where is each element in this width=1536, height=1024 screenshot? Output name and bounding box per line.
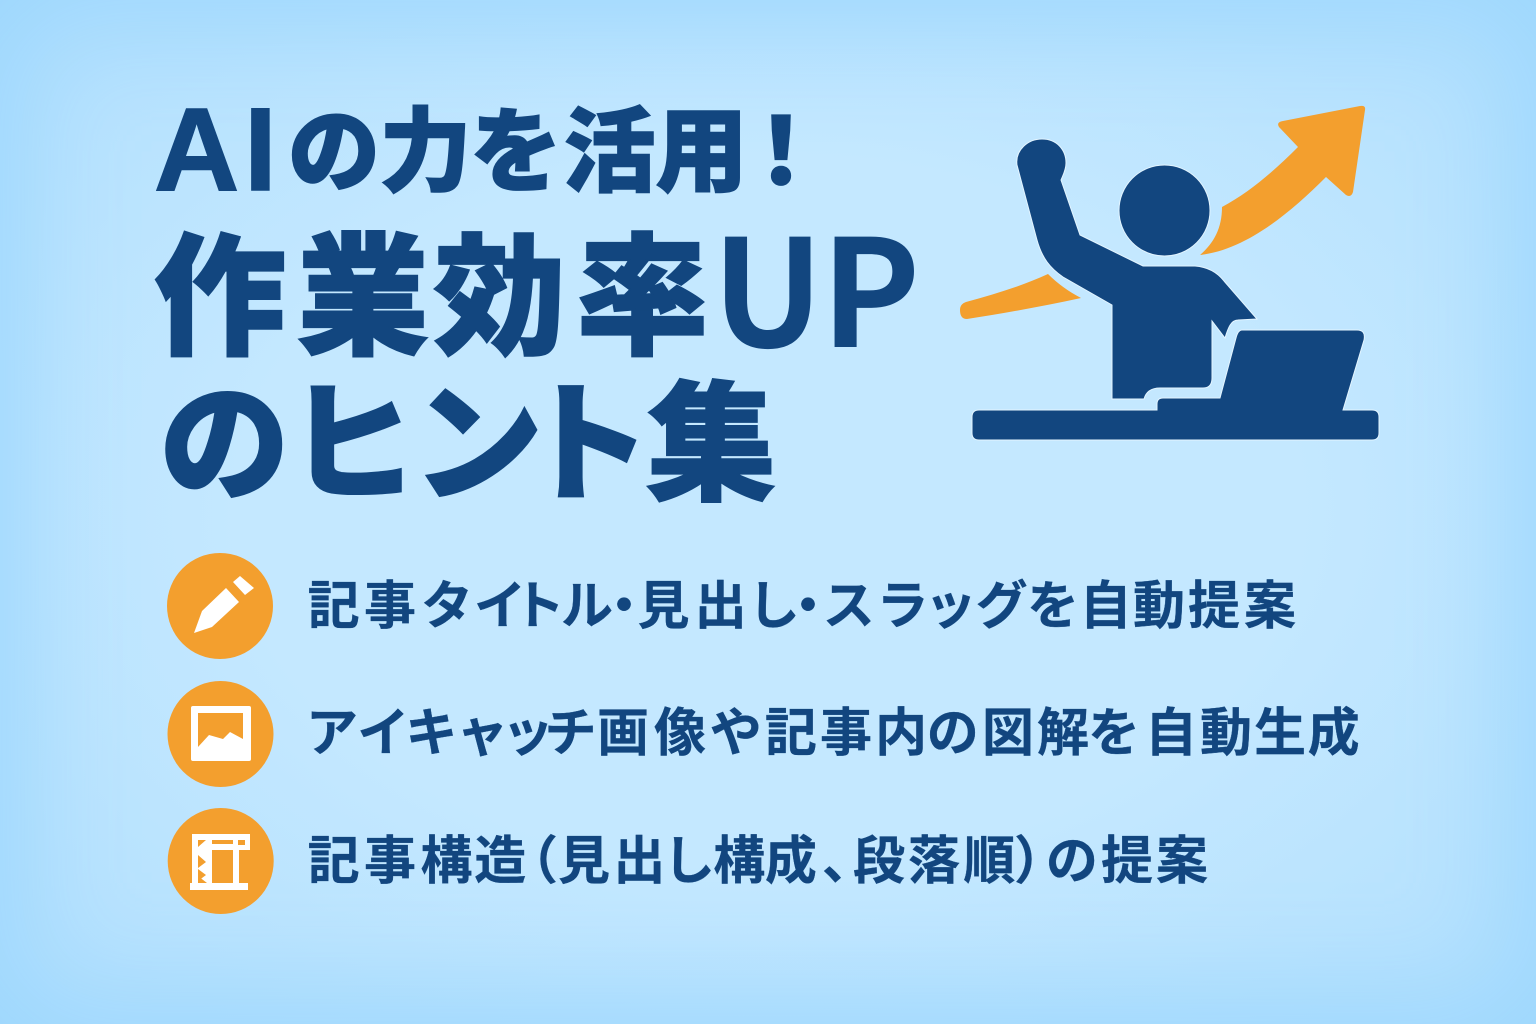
title line 1: の力を活用！: [288, 78, 827, 211]
icon: image: [168, 681, 274, 787]
title line 1: AI: [154, 84, 277, 216]
item 1 text: 記事タイトル・見出し・スラッグを自動提案: [308, 564, 1296, 639]
item 2 text: アイキャッチ画像や記事内の図解を自動生成: [306, 691, 1360, 766]
title line 3: のヒント集: [160, 340, 777, 528]
title line 2: UP: [712, 174, 920, 390]
icon: structure frame: [168, 808, 274, 914]
laptop and desk: [972, 330, 1379, 440]
person body: [1017, 139, 1257, 399]
illustration: person at laptop with rising arrow: [960, 106, 1379, 440]
list item 1: [167, 553, 1296, 659]
arrow: lower tail: [960, 274, 1081, 319]
arrow: upper segment: [1200, 106, 1365, 255]
person head: [1119, 165, 1210, 256]
title line 2: [154, 174, 920, 390]
title line 2: 作業効率: [154, 192, 708, 383]
icon: pencil: [167, 553, 273, 659]
list item 3: [168, 808, 1208, 914]
title: [154, 78, 920, 528]
item 3 text: 記事構造（見出し構成、段落順）の提案: [308, 819, 1208, 894]
list item 2: [168, 681, 1360, 787]
